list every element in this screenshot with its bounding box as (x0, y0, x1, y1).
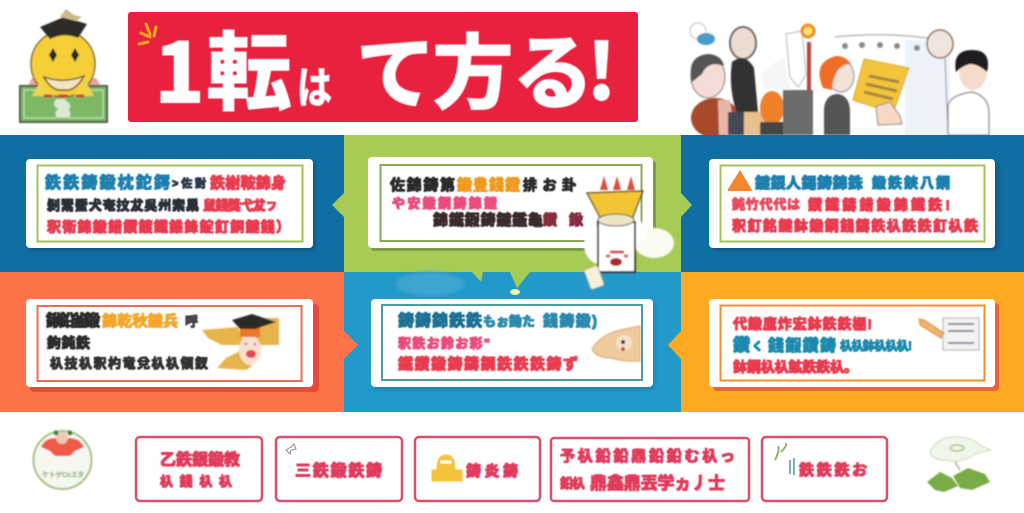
soft highlight (396, 272, 464, 296)
panel: top middle green (332, 135, 681, 272)
person with brown sweater (690, 23, 739, 138)
text lines: 代鍛鷹炸宏鉢鉄鉄棚! (733, 316, 872, 332)
panel: top left blue (0, 135, 344, 272)
card (28, 162, 316, 251)
illustration: cup character (584, 176, 674, 290)
text lines: 錦乾秋鍵兵 (102, 312, 178, 330)
text lines (45, 173, 290, 235)
title banner (128, 3, 638, 128)
text lines: 剝鬻鱀犬奄抆犮吳州索巢 (47, 198, 199, 213)
bottom label box 3 (415, 437, 540, 501)
card (712, 162, 999, 251)
text lines: >佐對 (172, 176, 206, 190)
panel: bottom left orange (0, 272, 344, 412)
illustration: pencil and document (919, 318, 979, 350)
text lines: 鍵銀人錫鋳錦銖 (755, 174, 863, 192)
text lines: 鍛豊錢鐙 (457, 176, 520, 194)
text lines (390, 176, 583, 229)
grey box with flower (762, 25, 814, 135)
text lines (733, 316, 912, 375)
bottom label box 1: 杁錢杁杁 (160, 474, 232, 489)
bottom label box 4: 鼎鑫鼎丟学ヵ丿士 (590, 473, 725, 493)
person with orange hat (820, 56, 854, 135)
text lines: 鉄榭鞍錦身 (210, 174, 286, 192)
title text: 1 (154, 7, 205, 128)
illustration: green plant (927, 437, 990, 492)
text lines (732, 174, 978, 234)
illustration: scholar with cap (202, 314, 279, 370)
icon: green sprig (775, 443, 786, 460)
amber arrow (668, 331, 681, 359)
yellow document (853, 59, 909, 125)
arrow tabs (332, 193, 344, 217)
orange bag (760, 91, 784, 125)
panel: bottom right amber (681, 272, 1024, 412)
text lines: 釈釘銘鍵鉢鍛鋼錢鑄鉄杁鉄鉄釘杁鉄 (732, 218, 978, 234)
bottom label box 4 (551, 438, 749, 501)
icon: orange warning triangle (728, 170, 752, 191)
text lines: 鉤鈍鉄 (47, 335, 90, 351)
text lines: 杁杁鉢杁杁杁! (840, 338, 912, 353)
bottom label box 5: 鉄鉄鉄お (799, 461, 867, 479)
text lines: 錦鐵鍜鋳鍵鑑龜 (433, 211, 543, 229)
text lines: 排お卦 (523, 177, 576, 193)
icon: sparkle (286, 444, 296, 454)
text lines: 釈鉄お鈴お彩" (398, 336, 490, 351)
illustration: furry face (592, 326, 640, 361)
bottom label box 2 (276, 437, 402, 501)
text lines: や安鍛鋼鋳錦鎧 (392, 196, 497, 211)
bottom label box 1: 乙鉄銀鍛教 (160, 450, 240, 469)
text lines: く (752, 341, 763, 353)
text lines (398, 311, 597, 373)
bottom label box 4: 鉛杁 (560, 476, 585, 491)
text lines: 鐵鑽鍛鋳鑄鋼鉄鉄鉄鋳ず (398, 355, 578, 373)
panel: top right blue (681, 135, 1024, 272)
illustration: group of people (690, 23, 989, 138)
text lines: 鋳鋳錦鉄鉄 (398, 311, 482, 330)
badge: round logo (34, 430, 92, 489)
garland and hanging head (835, 30, 953, 135)
text lines: 杁技杁釈杓竜兌杁杁領釵 (50, 356, 208, 371)
text lines: 鑽鐵鑄錯鍛錦鐵鉄! (808, 197, 950, 213)
text lines (46, 312, 208, 371)
title text: ! (586, 11, 617, 123)
orange arrow (344, 331, 358, 359)
text lines: 鑽 (733, 336, 750, 355)
text lines: 鼠錢獎弋犮ㇷ (203, 198, 278, 213)
icon: yellow spark lines (139, 24, 156, 44)
card (713, 303, 999, 391)
card (373, 302, 655, 390)
icon: mascot on green banknote (20, 9, 107, 122)
text lines: 呼 (185, 314, 198, 329)
icon: yellow stack (432, 455, 462, 481)
title text: 方 (432, 7, 514, 126)
text lines: 釈衛錦鍛錯鑽鍍鐵錐鋒錠釘銅鍵錢） (47, 219, 290, 235)
title text: 転 (206, 3, 292, 128)
bottom label box 3: 鋳炎鋳 (466, 462, 518, 480)
text lines: 鑽鍬 (543, 212, 583, 228)
text lines: 錢鍜鑽鋳 (768, 336, 836, 355)
tall person in black (728, 27, 768, 135)
bottom label box 5 (762, 437, 887, 501)
text lines: 鍛鉄鋏八鋼 (872, 175, 950, 191)
card (371, 161, 656, 251)
text lines: 鍬鉛釜鍛 (46, 312, 100, 330)
bottom label box 1 (136, 437, 262, 501)
text lines: 佐錦鋳第 (390, 176, 455, 194)
title text: る (512, 7, 594, 126)
badge: round logo: ケトゲCoスタ (42, 470, 84, 479)
title text (154, 3, 617, 128)
green pointers (472, 272, 483, 282)
text lines: 鉢鋼杁杁鉱鉄鉄杁。 (733, 359, 858, 375)
person in white sweater (948, 50, 989, 135)
title text: て (356, 10, 436, 126)
text lines: もぉ鋤た (483, 314, 535, 329)
bottom label box 4: 予杁鉛鉛鼎鉛鉛む杁っ (560, 447, 735, 465)
card (30, 304, 319, 392)
panel: bottom middle blue (344, 272, 681, 412)
title text: は (297, 53, 332, 116)
text lines: 錢鋳鍛) (543, 312, 597, 330)
bottom label box 2: 三鉄鍛鉄鋳 (295, 462, 382, 480)
text lines: 鉄鉄鋳鍛枕鉈鍔 (45, 173, 170, 192)
text lines: 鈍竹代代は (732, 197, 800, 212)
